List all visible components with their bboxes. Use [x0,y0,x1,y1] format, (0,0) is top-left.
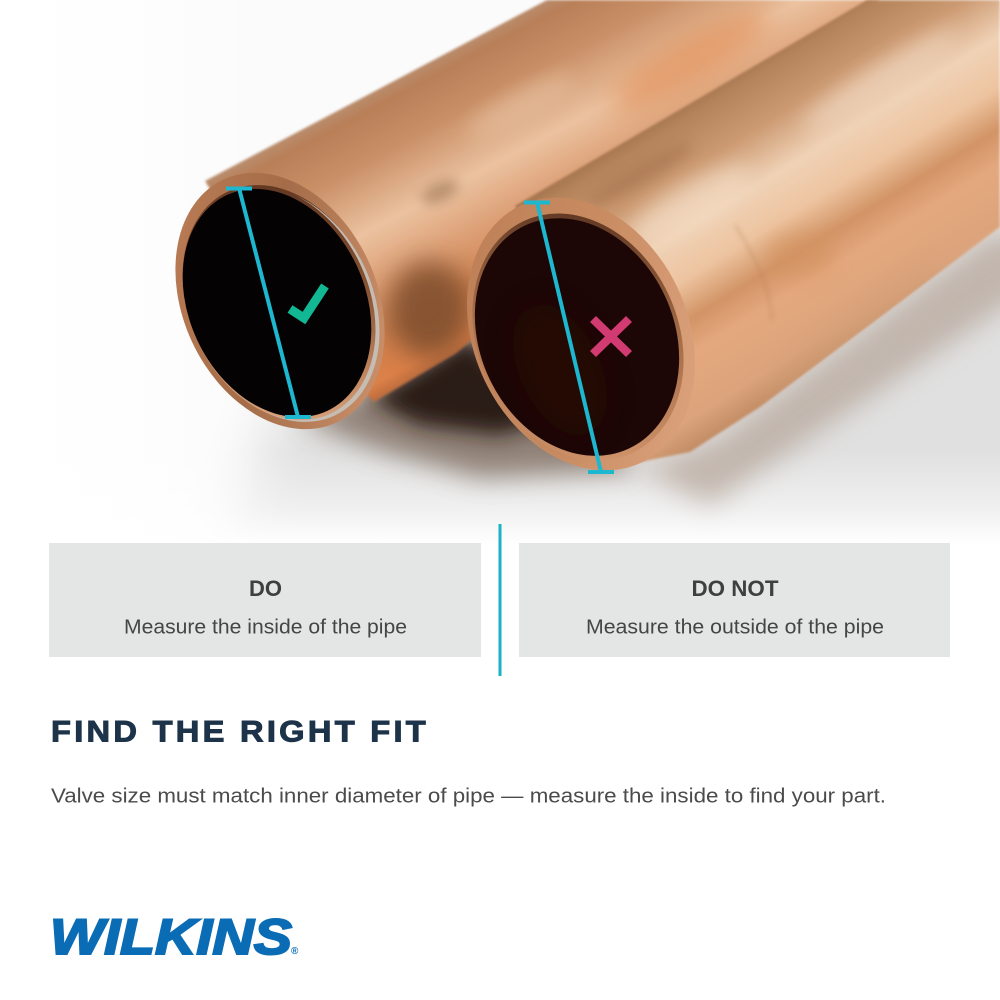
body text: Valve size must match inner diameter of pipe — measure the inside to find your part. [51,784,886,808]
panel text: do: Measure the inside of the pipe [124,616,407,638]
icon: pink cross mark [593,319,629,354]
measure line: outside of right pipe [524,202,614,472]
right pipe opening [467,198,695,470]
panel: do [49,543,481,657]
heading: FIND THE RIGHT FIT [51,716,429,748]
photo: copper pipes [175,0,1000,528]
panel: do not [519,543,950,657]
logo: Wilkins: WILKINS [50,909,292,965]
panel heading: do: DO [249,576,282,601]
measure line: inside of left pipe [226,188,311,417]
panel text: do not: Measure the outside of the pipe [586,616,884,638]
left pipe [175,0,880,430]
panel heading: do not: DO NOT [692,576,779,601]
right pipe [467,0,1000,470]
logo: Wilkins: ® [291,946,299,957]
left pipe opening [175,173,384,430]
divider line [498,524,502,676]
icon: green check mark [290,286,325,318]
